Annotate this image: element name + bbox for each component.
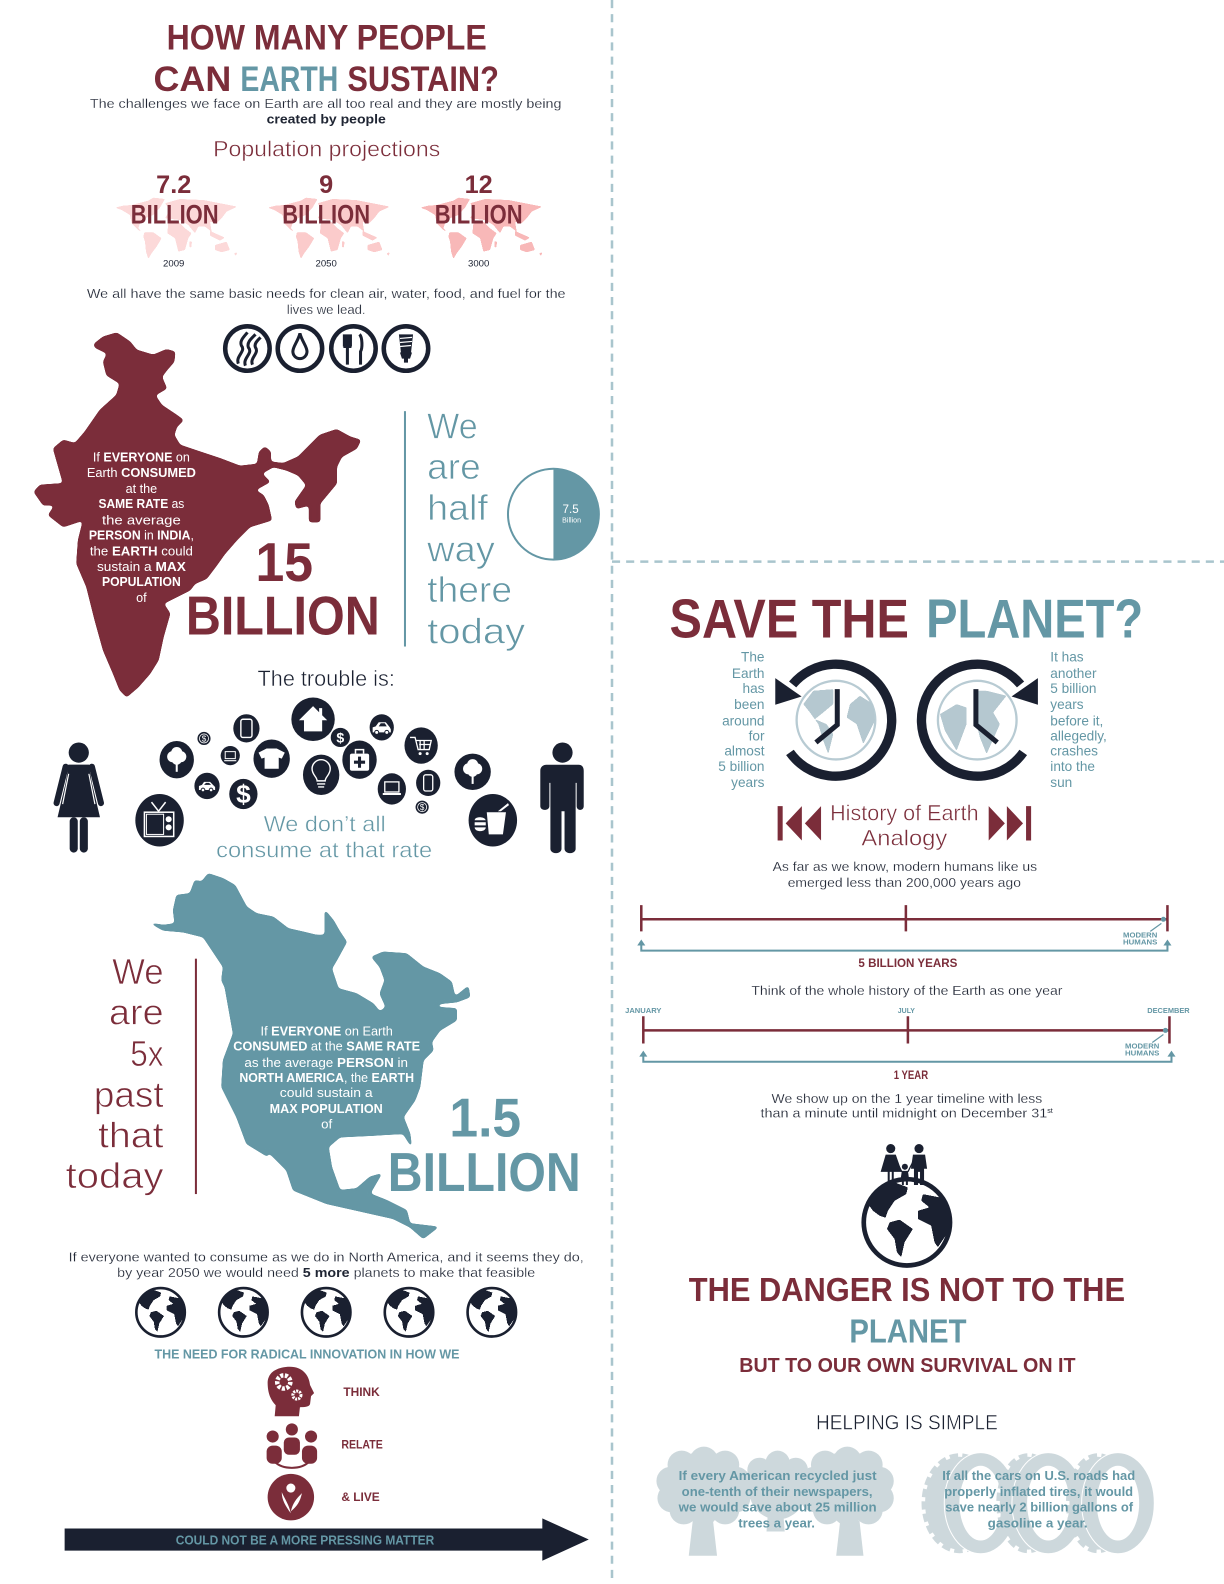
- icon: house: [291, 698, 335, 741]
- title: [154, 18, 499, 99]
- icon: woman: [57, 742, 101, 853]
- icon: phone: [233, 714, 260, 742]
- text: another 5 billion years: [1050, 650, 1107, 790]
- text: we are 5x past that today: are: [109, 991, 164, 1032]
- basic needs text: We all have the same basic needs for clean air, water, food, and fuel for the: [87, 286, 566, 301]
- icon: tiny dollar: [416, 801, 429, 814]
- timeline: 1 year: HUMANS: [1125, 1051, 1160, 1058]
- tires with fuel fact: [925, 1453, 1154, 1554]
- population projection 3000: 3000: [468, 259, 489, 270]
- text: we are 5x past that today: We: [112, 951, 164, 992]
- India text: sustain a MAX: [97, 560, 186, 574]
- icon row: air, water, food, fuel: [225, 326, 428, 371]
- heading: population projections: Population projections: [213, 137, 440, 162]
- text: another 5 billion years: 5 billion: [1050, 681, 1097, 696]
- heading: helping is simple: HELPING IS SIMPLE: [816, 1411, 998, 1434]
- text: we are 5x past that today: 5x: [130, 1033, 164, 1074]
- icon: clock globe rewind: [775, 664, 892, 776]
- text: modern humans emerged: emerged less than 200,000 years ago: [788, 875, 1021, 890]
- text: less than a minute: We show up on the 1 year timeline with less: [772, 1091, 1043, 1106]
- icon: tree: [454, 754, 491, 790]
- timeline: 1 year: [625, 1006, 1190, 1082]
- consumption bubbles cluster: [135, 698, 517, 847]
- timeline: 5 billion years: MODERN: [1123, 932, 1157, 939]
- label: and live: & LIVE: [341, 1490, 380, 1504]
- timeline: 1 year: DECEMBER: [1147, 1006, 1190, 1015]
- text: we are half way there today: way: [426, 529, 496, 570]
- pie chart: 7.5 billion: [508, 469, 599, 560]
- arrow banner: [65, 1518, 589, 1561]
- text: modern humans emerged: As far as we know, modern humans like us: [773, 859, 1038, 874]
- India text: of: [136, 591, 147, 605]
- trees with recycling fact: we would save about 25 million: [678, 1499, 877, 1514]
- heading: the trouble is: The trouble is:: [258, 666, 395, 691]
- tires with fuel fact: save nearly 2 billion gallons of: [945, 1499, 1134, 1514]
- text: we don't all consume at that rate: We don’t all: [264, 811, 386, 836]
- icon: dollar: [331, 728, 350, 747]
- basic needs text: [87, 286, 566, 317]
- icon: clock globe forward: [921, 664, 1038, 776]
- timeline: 1 year: JULY: [898, 1006, 915, 1015]
- intro text: [90, 96, 562, 127]
- text: we are half way there today: are: [427, 446, 481, 487]
- text: another 5 billion years: crashes: [1050, 744, 1098, 759]
- text: we don't all consume at that rate: consume at that rate: [216, 838, 432, 863]
- text: less than a minute: than a minute until midnight on December 31: [760, 1105, 1047, 1120]
- icon: bulb: [303, 755, 339, 795]
- icon: tiny dollar: $: [420, 803, 425, 812]
- India text: the EARTH could: [90, 545, 193, 559]
- icon: television: [135, 794, 184, 847]
- text: another 5 billion years: another: [1050, 666, 1097, 681]
- North America text: MAX POPULATION: [270, 1102, 383, 1116]
- text: modern humans emerged: [773, 859, 1038, 890]
- text: less than a minute: [760, 1091, 1053, 1120]
- icon: person leaf: [268, 1474, 314, 1520]
- heading: history of earth analogy: Analogy: [861, 826, 948, 851]
- tires with fuel fact: If all the cars on U.S. roads had: [942, 1468, 1135, 1483]
- population projection 3000: 12: [465, 171, 493, 199]
- icon: dollar: [229, 779, 258, 809]
- text: earth has been around: [718, 650, 765, 790]
- India text: SAME RATE as: [98, 497, 184, 511]
- India text: [87, 451, 196, 605]
- text: five more planets: [69, 1250, 584, 1280]
- map: North America: [150, 874, 470, 1239]
- icon: dollar: $: [236, 779, 251, 809]
- text: earth has been around: almost: [724, 744, 765, 759]
- North America text: NORTH AMERICA, the EARTH: [239, 1071, 414, 1085]
- trees with recycling fact: [656, 1447, 894, 1556]
- India text: PERSON in INDIA,: [89, 528, 194, 542]
- timeline: 1 year: MODERN: [1125, 1044, 1159, 1051]
- timeline: 5 billion years: [637, 905, 1171, 970]
- text: earth has been around: 5 billion: [718, 759, 764, 774]
- population projection 2050: 9: [319, 171, 333, 199]
- text: we are 5x past that today: that: [98, 1115, 164, 1156]
- icon: phone: [416, 770, 440, 796]
- text: we are half way there today: there: [427, 569, 512, 610]
- stat: 15 billion: [186, 532, 380, 646]
- text: we are half way there today: half: [427, 487, 489, 528]
- stat: 15 billion: BILLION: [186, 585, 380, 646]
- icon: tiny dollar: [197, 732, 211, 745]
- text: we are half way there today: today: [427, 610, 526, 652]
- stat: 1.5 billion: BILLION: [388, 1142, 581, 1203]
- North America text: CONSUMED at the SAME RATE: [233, 1040, 420, 1054]
- population projection 3000: BILLION: [435, 198, 523, 229]
- text: another 5 billion years: allegedly,: [1050, 728, 1107, 743]
- row of five globes: [136, 1288, 516, 1336]
- text: earth has been around: been: [734, 697, 764, 712]
- text: one year analogy: Think of the whole history of the Earth as one year: [751, 983, 1063, 998]
- icon: tiny dollar: $: [202, 734, 207, 743]
- title: save the planet: PLANET?: [926, 588, 1143, 649]
- heading: history of earth analogy: [830, 800, 979, 851]
- timeline: 1 year: JANUARY: [625, 1006, 661, 1015]
- India text: at the: [126, 482, 157, 496]
- text: another 5 billion years: before it,: [1050, 713, 1103, 728]
- text: we don't all consume at that rate: [216, 811, 432, 863]
- icon: dollar: $: [336, 729, 344, 746]
- title: save the planet: SAVE THE: [670, 588, 909, 649]
- text: earth has been around: The: [741, 650, 764, 665]
- heading: the danger: THE DANGER IS NOT TO THE: [689, 1272, 1125, 1309]
- India text: Earth CONSUMED: [87, 466, 196, 480]
- text: earth has been around: has: [743, 681, 765, 696]
- trees with recycling fact: If every American recycled just: [679, 1468, 877, 1483]
- icon: medical kit: [342, 740, 377, 779]
- North America text: could sustain a: [280, 1086, 374, 1100]
- icon: fast forward: [989, 806, 1031, 840]
- text: earth has been around: around: [722, 713, 764, 728]
- icon: man: [540, 742, 584, 853]
- trees with recycling fact: one-tenth of their newspapers,: [682, 1484, 873, 1499]
- title: save the planet: [670, 588, 1143, 649]
- icon: shirt: [253, 739, 290, 778]
- icon: family on globe: [864, 1144, 950, 1266]
- arrow banner: COULD NOT BE A MORE PRESSING MATTER: [176, 1534, 434, 1548]
- text: less than a minute: st: [1047, 1108, 1053, 1115]
- label: think: THINK: [343, 1385, 380, 1399]
- text: we are half way there today: We: [427, 405, 478, 446]
- map: India: [34, 333, 361, 697]
- icon: group of people: [267, 1423, 317, 1468]
- stat: 1.5 billion: [388, 1087, 581, 1203]
- text: another 5 billion years: sun: [1050, 775, 1072, 790]
- pie chart: 7.5 billion: Billion: [562, 517, 581, 524]
- label: relate: RELATE: [341, 1438, 383, 1452]
- text: another 5 billion years: It has: [1050, 650, 1084, 665]
- timeline: 1 year: 1 YEAR: [894, 1068, 928, 1082]
- heading: the danger: [689, 1272, 1125, 1377]
- heading: the danger: PLANET: [849, 1314, 966, 1351]
- North America text: of: [321, 1117, 333, 1131]
- heading: radical innovation: THE NEED FOR RADICAL INNOVATION IN HOW WE: [155, 1348, 460, 1362]
- North America text: [233, 1024, 420, 1131]
- icon: laptop: [378, 773, 406, 805]
- tires with fuel fact: gasoline a year.: [988, 1515, 1088, 1530]
- intro text: The challenges we face on Earth are all too real and they are mostly being: [90, 96, 562, 111]
- population projection 2009: 2009: [163, 259, 184, 270]
- stat: 15 billion: 15: [256, 532, 313, 593]
- stat: 1.5 billion: 1.5: [449, 1087, 521, 1148]
- intro text: created by people: [267, 112, 386, 127]
- title: EARTH: [240, 60, 338, 99]
- icon: food: [469, 794, 517, 847]
- text: earth has been around: for: [749, 728, 765, 743]
- title: CAN: [154, 60, 231, 99]
- icon: cart: [404, 727, 438, 764]
- text: earth has been around: years: [731, 775, 765, 790]
- timeline: 5 billion years: 5 BILLION YEARS: [858, 956, 957, 970]
- population projection 2009: BILLION: [131, 198, 219, 229]
- tires with fuel fact: properly inflated tires, it would: [944, 1484, 1133, 1499]
- title: HOW MANY PEOPLE: [167, 18, 487, 58]
- North America text: as the average PERSON in: [244, 1056, 408, 1070]
- population projection 2009: [115, 171, 237, 270]
- North America text: If EVERYONE on Earth: [261, 1024, 393, 1038]
- text: we are 5x past that today: past: [94, 1074, 164, 1115]
- population projection 2050: BILLION: [282, 198, 370, 229]
- title: SUSTAIN?: [347, 60, 499, 99]
- timeline: 5 billion years: HUMANS: [1123, 940, 1158, 947]
- basic needs text: lives we lead.: [287, 302, 366, 317]
- heading: history of earth analogy: History of Earth: [830, 800, 979, 825]
- icon: tree: [160, 741, 194, 778]
- population projection 3000: [420, 171, 542, 270]
- icon: rewind: [778, 806, 821, 840]
- text: another 5 billion years: into the: [1050, 759, 1095, 774]
- population projection 2009: 7.2: [156, 171, 191, 199]
- icon: small car: [194, 773, 220, 799]
- text: we are half way there today: [426, 405, 526, 652]
- icon: head with gears: [268, 1367, 314, 1416]
- population projection 2050: 2050: [316, 259, 337, 270]
- pie chart: 7.5 billion: 7.5: [563, 503, 579, 516]
- text: earth has been around: Earth: [732, 666, 764, 681]
- heading: the danger: BUT TO OUR OWN SURVIVAL ON IT: [739, 1355, 1076, 1377]
- India text: If EVERYONE on: [93, 451, 190, 465]
- text: five more planets: If everyone wanted to consume as we do in North America, and it seems they do,: [69, 1250, 584, 1265]
- text: we are 5x past that today: today: [66, 1155, 164, 1196]
- text: we are 5x past that today: [66, 951, 164, 1196]
- population projection 2050: [268, 171, 390, 270]
- India text: POPULATION: [102, 575, 181, 589]
- India text: the average: [102, 513, 181, 527]
- text: five more planets: by year 2050 we would need 5 more planets to make that feasible: [117, 1265, 535, 1280]
- text: another 5 billion years: years: [1050, 697, 1084, 712]
- icon: car: [370, 714, 394, 740]
- icon: small laptop: [221, 746, 240, 765]
- trees with recycling fact: trees a year.: [738, 1515, 815, 1530]
